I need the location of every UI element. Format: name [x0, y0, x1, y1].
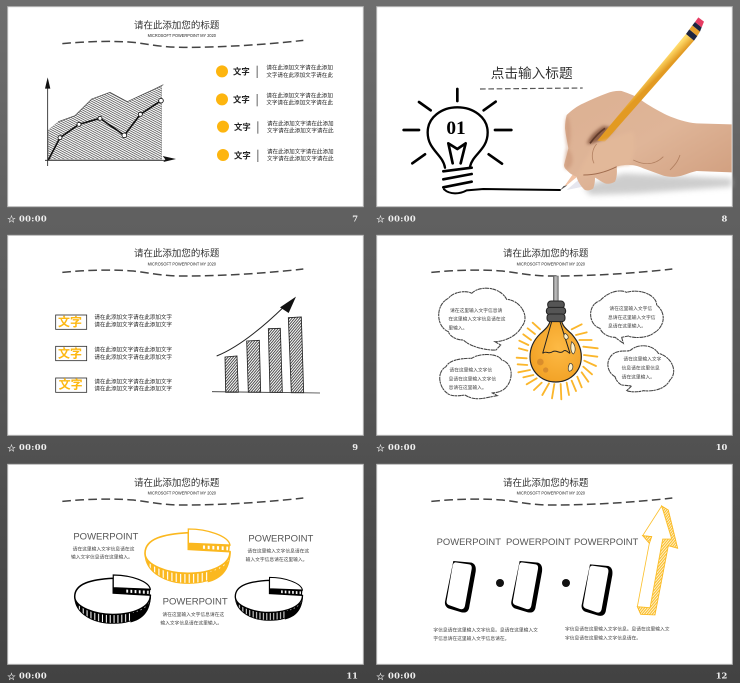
footer: slide 11: ☆ — [7, 672, 16, 683]
footer: slide 8: ☆ — [376, 215, 385, 226]
slide 7 heading: 请在此添加您的标题 — [134, 19, 220, 31]
text block: bottom centre: POWERPOINT — [163, 597, 228, 607]
cloud callout: upper left: 在这里输入文字信息请在这 — [448, 316, 506, 323]
text block: upper right — [246, 534, 314, 563]
icon: dot 2 — [562, 579, 570, 587]
icon: sketched block 1 — [445, 561, 476, 613]
slide 12 heading — [431, 477, 672, 505]
footer: slide 8: 8 — [722, 213, 728, 223]
footer: slide 11: 00:00 — [19, 671, 47, 681]
cloud callout: lower right — [608, 346, 674, 392]
black pie left — [75, 575, 151, 623]
panel: slide 8 hand drawing a bulb — [377, 7, 732, 207]
footer: slide 11 — [7, 671, 358, 683]
slide 11 heading — [62, 477, 303, 505]
list: three labelled text rows: 文字 — [59, 377, 83, 392]
footer: slide 7: ☆ — [7, 215, 16, 226]
footer: slide 10: ☆ — [376, 443, 385, 454]
list: three labelled text rows: 请在此添加文字请在此添加文字 — [94, 320, 172, 328]
slide 10 heading: MICROSOFT POWERPOINT MY 2020 — [517, 262, 586, 267]
list: four text items: 文字 — [233, 67, 250, 77]
text block: lower right — [565, 625, 670, 641]
footer: slide 12: 00:00 — [388, 671, 416, 681]
footer: slide 9: 9 — [352, 442, 358, 452]
slide 12 heading: MICROSOFT POWERPOINT MY 2020 — [517, 491, 586, 496]
labels: three POWERPOINT headings: POWERPOINT — [506, 537, 571, 547]
icon: sketched block 2 — [511, 561, 542, 613]
text block: upper left: 请在这里输入文字信息请在这 — [73, 546, 135, 553]
list: three labelled text rows — [56, 313, 172, 393]
black pie right — [235, 577, 303, 620]
list: three labelled text rows: 请在此添加文字请在此添加文字 — [94, 385, 172, 393]
list: three labelled text rows: 文字 — [58, 314, 82, 329]
list: four text items: 文字 — [234, 150, 251, 160]
slide 10 heading: 请在此添加您的标题 — [503, 248, 589, 260]
footer: slide 9: ☆ — [7, 443, 16, 454]
cloud callout: lower left: 息请在这里输入文字信 — [449, 376, 496, 383]
list: four text items: 请在此添加文字请在此添加 — [266, 64, 333, 72]
slide 9 heading: 请在此添加您的标题 — [134, 248, 220, 260]
panel: slide 11 pies — [8, 464, 363, 664]
slide 11 heading: MICROSOFT POWERPOINT MY 2020 — [148, 491, 217, 496]
text block: lower right: 字信息请在这里输入文字信息。息请在这里输入文 — [565, 625, 670, 632]
slide 7 heading: MICROSOFT POWERPOINT MY 2020 — [148, 33, 217, 38]
icon: hand-drawn light bulb: 01 — [446, 118, 466, 139]
list: three labelled text rows: 请在此添加文字请在此添加文字 — [94, 346, 172, 354]
icon: hand-drawn light bulb — [404, 89, 560, 193]
footer: slide 10: 10 — [716, 442, 728, 452]
text block: bottom centre — [160, 597, 228, 626]
yellow pie — [145, 529, 230, 583]
icon: sketched block 3 — [582, 564, 612, 616]
cloud callout: upper right: 息请在这里输入。 — [608, 323, 646, 330]
list: four text items: 文字请在此添加文字请在此 — [266, 71, 333, 79]
slide 8 heading — [480, 66, 583, 89]
list: four text items — [216, 64, 334, 163]
list: four text items: 请在此添加文字请在此添加 — [267, 147, 334, 155]
footer: slide 11: 11 — [346, 671, 358, 681]
text block: upper left: POWERPOINT — [73, 531, 139, 541]
icon: dot 1 — [496, 579, 504, 587]
footer: slide 9 — [7, 442, 358, 454]
text block: lower right: 字信息请在这里输入文字信息请在。 — [565, 634, 641, 641]
cloud callout: upper left: 请在这里输入文字信息请 — [450, 307, 502, 314]
cloud callout: upper left — [439, 288, 525, 350]
text block: lower left: 字信息请在这里输入文字信息。息请在这里输入文 — [433, 626, 538, 633]
list: four text items: 文字 — [233, 95, 250, 105]
text block: lower left — [433, 626, 538, 642]
text block: upper right: 输入文字信息请在这里输入。 — [246, 556, 307, 563]
labels: three POWERPOINT headings — [437, 537, 639, 547]
footer: slide 12: ☆ — [376, 672, 385, 683]
text block: upper left — [71, 531, 139, 561]
list: four text items: 文字 — [234, 122, 251, 132]
text block: lower left: 字信息请在这里输入文字信息请在。 — [433, 635, 509, 642]
text block: upper right: 请在这里输入文字信息请在这 — [247, 548, 309, 555]
panel: slide 10 bulb and clouds — [377, 235, 732, 435]
bar chart with rising arrow — [212, 297, 320, 393]
footer: slide 8 — [376, 213, 728, 226]
cloud callout: lower left — [440, 354, 511, 399]
list: three labelled text rows: 请在此添加文字请在此添加文字 — [94, 353, 172, 361]
list: four text items: 文字请在此添加文字请在此 — [267, 155, 334, 163]
footer: slide 8: 00:00 — [388, 213, 416, 223]
cloud callout: lower right: 信息请在这里信息 — [622, 364, 660, 371]
list: four text items: 文字请在此添加文字请在此 — [267, 127, 334, 135]
slide 8 heading: 点击输入标题 — [491, 66, 573, 81]
cloud callout: lower left: 息请在这里输入。 — [449, 384, 487, 391]
list: three labelled text rows: 请在此添加文字请在此添加文字 — [94, 377, 172, 385]
footer: slide 7 — [7, 213, 358, 226]
cloud callout: upper right: 请在这里输入文字信 — [609, 305, 652, 312]
panel: slide 9 bar chart — [8, 235, 363, 435]
slide 9 heading — [62, 248, 303, 276]
panel: slide 7 area chart — [8, 7, 363, 207]
slide 11 heading: 请在此添加您的标题 — [134, 477, 220, 489]
text block: upper left: 输入文字信息请在这里输入。 — [71, 554, 133, 561]
list: three labelled text rows: 文字 — [58, 345, 82, 360]
footer: slide 10 — [376, 442, 728, 454]
cloud callout: upper right — [591, 291, 663, 343]
cloud callout: lower right: 请在这里输入文字 — [623, 356, 662, 363]
labels: three POWERPOINT headings: POWERPOINT — [437, 537, 502, 547]
cloud callout: upper left: 里输入。 — [448, 324, 467, 331]
arrow: yellow sketched up arrow — [637, 506, 678, 615]
text block: upper right: POWERPOINT — [248, 534, 314, 544]
footer: slide 12: 12 — [716, 671, 728, 681]
footer: slide 10: 00:00 — [388, 442, 416, 452]
slide 7 heading — [62, 19, 303, 47]
cloud callout: upper right: 息请在这里输入文字信 — [608, 314, 656, 321]
text block: bottom centre: 请在这里输入文字信息请在这 — [162, 611, 224, 618]
text block: bottom centre: 输入文字信息请在这里输入。 — [160, 619, 222, 626]
labels: three POWERPOINT headings: POWERPOINT — [574, 537, 639, 547]
footer: slide 9: 00:00 — [19, 442, 47, 452]
cloud callout: lower right: 请在这里输入。 — [622, 373, 655, 380]
slide 12 heading: 请在此添加您的标题 — [503, 477, 589, 489]
illustration: hanging glowing bulb — [517, 276, 598, 399]
slide 10 heading — [431, 248, 672, 276]
list: three labelled text rows: 请在此添加文字请在此添加文字 — [94, 313, 172, 321]
list: four text items: 请在此添加文字请在此添加 — [267, 119, 334, 127]
list: four text items: 请在此添加文字请在此添加 — [266, 91, 333, 99]
footer: slide 12 — [376, 671, 728, 683]
panel: slide 12 blocks and arrow — [377, 464, 732, 664]
area chart — [45, 77, 176, 166]
hand holding pencil — [560, 17, 732, 195]
list: four text items: 文字请在此添加文字请在此 — [266, 99, 333, 107]
cloud callout: lower left: 请在这里输入文字信 — [449, 367, 492, 374]
footer: slide 7: 7 — [352, 213, 358, 223]
slide 9 heading: MICROSOFT POWERPOINT MY 2020 — [148, 262, 217, 267]
footer: slide 7: 00:00 — [19, 213, 47, 223]
